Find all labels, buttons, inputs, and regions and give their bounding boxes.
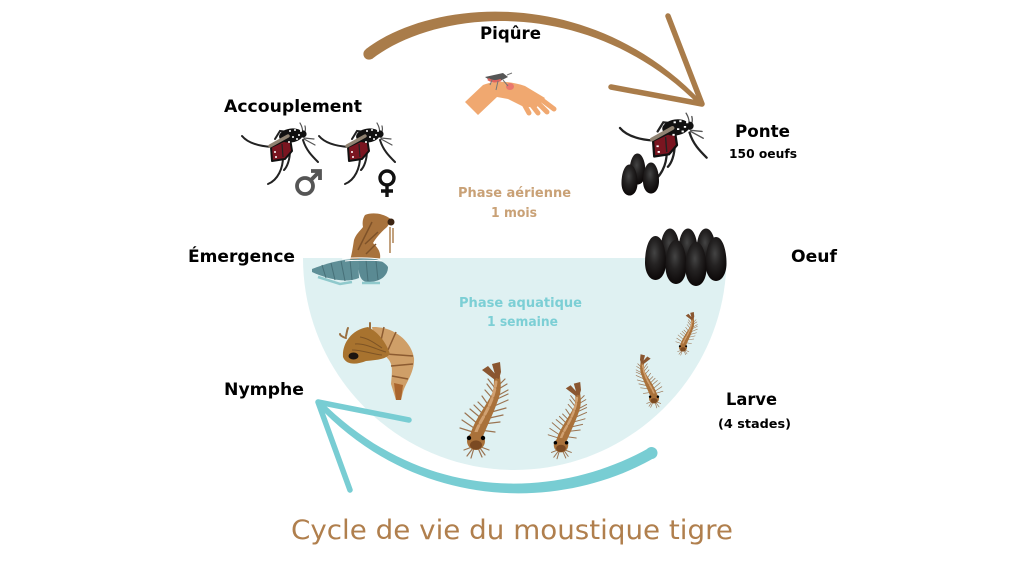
label: Larve, 4 stades: Larve <box>726 390 777 409</box>
icon: male symbol <box>297 171 320 194</box>
icon: larva stage 4 <box>460 362 508 458</box>
label: Phase aquatique, 1 semaine: Phase aquatique <box>459 295 582 311</box>
label: Phase aquatique, 1 semaine <box>459 295 582 330</box>
icon: adult emerging from pupal skin <box>312 213 394 284</box>
label: Accouplement: Accouplement <box>224 97 362 117</box>
label: Phase aérienne, 1 mois <box>458 186 571 221</box>
icon: egg-laying mosquito <box>620 113 707 183</box>
icon: cluster of eggs <box>645 228 726 286</box>
label: Phase aérienne, 1 mois: 1 mois <box>491 206 537 221</box>
icon: mosquito biting a hand <box>465 73 554 115</box>
icon: larva stage 2 <box>636 354 663 408</box>
panel: aquatic phase water half circle <box>303 258 726 470</box>
label: Larve, 4 stades: (4 stades) <box>718 416 791 431</box>
icon: male mosquito <box>242 123 318 184</box>
arrow: aquatic cycle teal arc <box>316 400 658 493</box>
label: Ponte, 150 oeufs: Ponte <box>735 122 790 141</box>
icon: female mosquito <box>319 123 395 184</box>
label: Piqûre: Piqûre <box>480 24 541 44</box>
arrow: aerial cycle brown arc <box>363 12 702 105</box>
title: Cycle de vie du moustique tigre <box>291 515 733 546</box>
icon: larva stage 3 <box>548 382 587 459</box>
label: Phase aquatique, 1 semaine: 1 semaine <box>487 314 558 330</box>
icon: larva stage 1 <box>676 312 697 355</box>
label: Nymphe: Nymphe <box>224 380 304 400</box>
label: Oeuf: Oeuf <box>791 247 838 267</box>
icon: three laid eggs <box>622 154 659 196</box>
label: Émergence: Émergence <box>188 245 295 267</box>
label: Ponte, 150 oeufs: 150 oeufs <box>729 146 797 161</box>
label: Ponte, 150 oeufs <box>729 122 797 161</box>
icon: pupa <box>340 323 414 400</box>
icon: female symbol <box>380 171 394 197</box>
label: Larve, 4 stades <box>718 390 791 431</box>
label: Phase aérienne, 1 mois: Phase aérienne <box>458 186 571 201</box>
